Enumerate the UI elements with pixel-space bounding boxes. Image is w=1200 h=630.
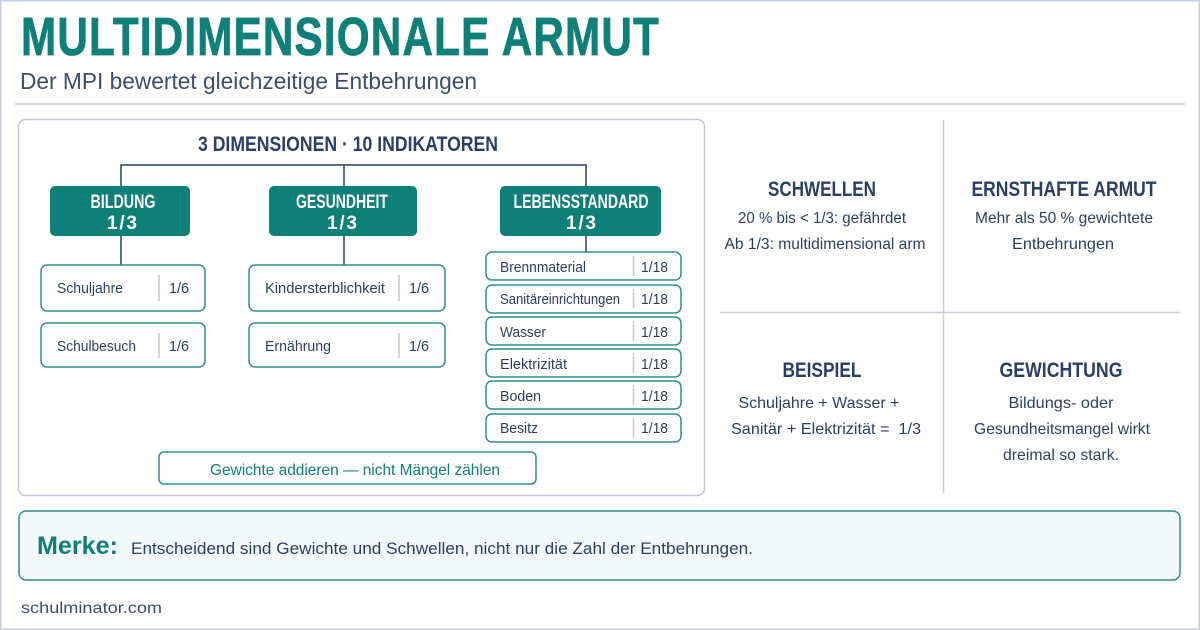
panel: Gewichtung: Bildungs- oder bbox=[1008, 395, 1114, 412]
callout: Merke: Merke: bbox=[37, 532, 118, 560]
indicator: Elektrizität bbox=[486, 349, 681, 377]
indicator: Ernährung: 1/6 bbox=[409, 338, 429, 355]
indicator: Sanitäreinrichtungen bbox=[486, 285, 681, 313]
indicator: Sanitäreinrichtungen: Sanitäreinrichtungen bbox=[500, 291, 620, 308]
tree connectors bbox=[121, 165, 586, 265]
indicator: Brennmaterial: 1/18 bbox=[641, 259, 668, 276]
panel: Ernsthafte Armut bbox=[972, 178, 1157, 253]
panel: Ernsthafte Armut: ERNSTHAFTE ARMUT bbox=[972, 178, 1157, 201]
indicator: Schulbesuch bbox=[41, 323, 205, 367]
indicator: Schuljahre: Schuljahre bbox=[57, 280, 123, 297]
indicator: Brennmaterial bbox=[486, 252, 681, 280]
panel: Beispiel: Sanitär + Elektrizität = 1/3 bbox=[731, 421, 921, 438]
indicator: Schulbesuch: 1/6 bbox=[169, 338, 189, 355]
panel: Ernsthafte Armut: Mehr als 50 % gewichtete bbox=[975, 210, 1153, 227]
indicator: Brennmaterial: Brennmaterial bbox=[500, 259, 586, 276]
indicator: Schuljahre bbox=[41, 265, 205, 311]
indicator: Besitz bbox=[486, 414, 681, 442]
indicator: Kindersterblichkeit: 1/6 bbox=[409, 280, 429, 297]
indicator: Ernährung: Ernährung bbox=[265, 338, 331, 355]
callout: add weights bbox=[159, 452, 536, 484]
subtitle: Der MPI bewertet gleichzeitige Entbehrungen bbox=[20, 68, 477, 94]
dimension: Bildung: BILDUNG bbox=[90, 192, 156, 213]
dimension: Bildung bbox=[50, 186, 190, 236]
indicator: Boden: 1/18 bbox=[641, 388, 668, 405]
dimension: Lebensstandard: 1/3 bbox=[566, 213, 596, 234]
panel: Schwellen: 20 % bis < 1/3: gefährdet bbox=[738, 210, 907, 227]
dimension: Bildung: 1/3 bbox=[107, 213, 137, 234]
indicator: Boden: Boden bbox=[500, 388, 541, 405]
panel: Gewichtung: dreimal so stark. bbox=[1003, 447, 1119, 464]
indicator: Wasser bbox=[486, 317, 681, 345]
panel: Schwellen: SCHWELLEN bbox=[768, 178, 876, 201]
indicator: Boden bbox=[486, 381, 681, 409]
panel: Gewichtung: GEWICHTUNG bbox=[1000, 359, 1122, 382]
indicator: Elektrizität: 1/18 bbox=[641, 356, 668, 373]
panel: Gewichtung bbox=[974, 359, 1151, 464]
dimension: Gesundheit: 1/3 bbox=[327, 213, 357, 234]
dimension: Gesundheit: GESUNDHEIT bbox=[296, 192, 388, 213]
indicator: Wasser: Wasser bbox=[500, 324, 546, 341]
panel: dimensions and indicators bbox=[18, 120, 704, 496]
dimension: Lebensstandard: LEBENSSTANDARD bbox=[514, 192, 648, 213]
indicator: Sanitäreinrichtungen: 1/18 bbox=[641, 291, 668, 308]
footer: source: schulminator.com bbox=[21, 600, 162, 617]
panel: Gewichtung: Gesundheitsmangel wirkt bbox=[974, 421, 1151, 438]
indicator: Schulbesuch: Schulbesuch bbox=[57, 338, 136, 355]
indicator: Besitz: 1/18 bbox=[641, 420, 668, 437]
indicator: Schuljahre: 1/6 bbox=[169, 280, 189, 297]
callout: add weights: Gewichte addieren — nicht Mängel zählen bbox=[210, 462, 500, 479]
callout: Merke: Entscheidend sind Gewichte und Schwellen, nicht nur die Zahl der Entbehrungen. bbox=[131, 539, 753, 558]
panel: Beispiel: BEISPIEL bbox=[782, 359, 862, 382]
indicator: Kindersterblichkeit bbox=[249, 265, 445, 311]
indicator: Kindersterblichkeit: Kindersterblichkeit bbox=[265, 280, 386, 297]
indicator: Ernährung bbox=[249, 323, 445, 367]
panel: Beispiel bbox=[731, 359, 921, 438]
panel: Schwellen bbox=[724, 178, 926, 253]
panel: Beispiel: Schuljahre + Wasser + bbox=[738, 395, 900, 412]
indicator: Wasser: 1/18 bbox=[641, 324, 668, 341]
title: MULTIDIMENSIONALE ARMUT bbox=[21, 7, 660, 67]
callout: Merke bbox=[19, 511, 1180, 580]
indicator: Elektrizität: Elektrizität bbox=[500, 356, 568, 373]
panel: Ernsthafte Armut: Entbehrungen bbox=[1012, 236, 1114, 253]
panel heading: 3 DIMENSIONEN · 10 INDIKATOREN bbox=[198, 133, 498, 156]
dimension: Lebensstandard bbox=[500, 186, 661, 236]
indicator: Besitz: Besitz bbox=[500, 420, 538, 437]
dimension: Gesundheit bbox=[269, 186, 417, 236]
panel: Schwellen: Ab 1/3: multidimensional arm bbox=[724, 236, 926, 253]
